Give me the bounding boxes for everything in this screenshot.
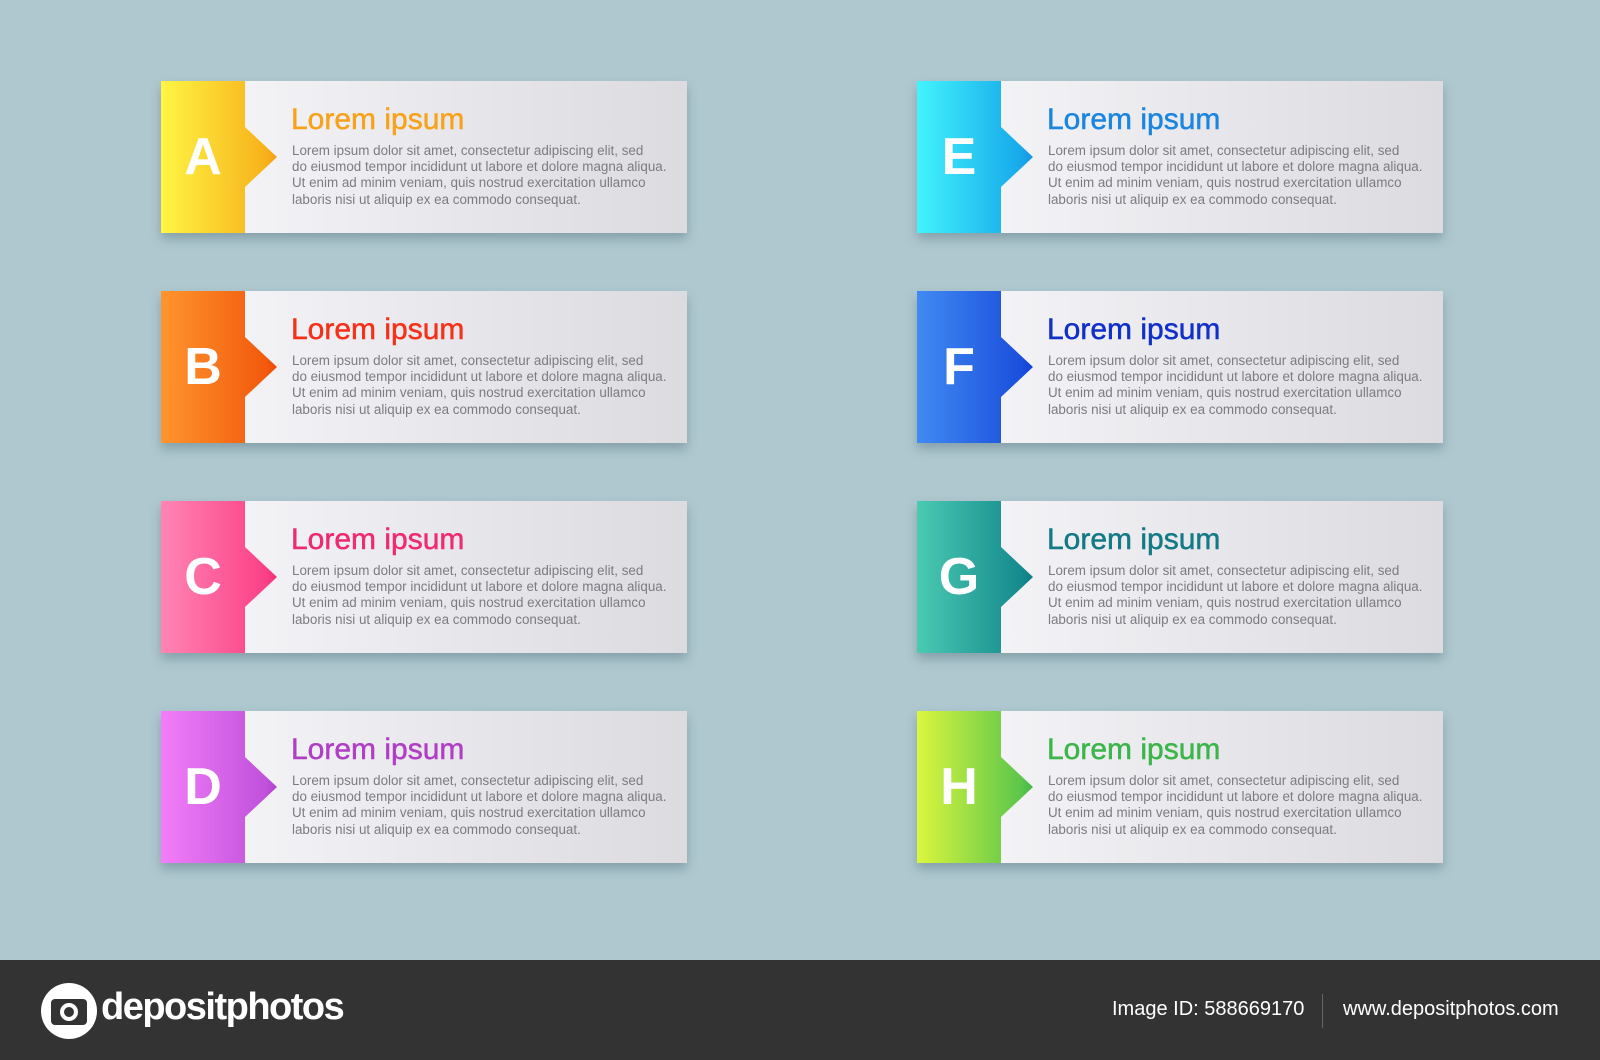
body F: laboris nisi ut aliquip ex ea commodo consequat. [1048, 402, 1337, 417]
body F: do eiusmod tempor incididunt ut labore et dolore magna aliqua. [1048, 369, 1422, 384]
letter C: C [184, 548, 222, 606]
tab A [161, 81, 277, 233]
body E [1048, 143, 1422, 207]
body E: Lorem ipsum dolor sit amet, consectetur adipiscing elit, sed [1048, 143, 1399, 158]
tab C [161, 501, 277, 653]
title C: Lorem ipsum [291, 523, 464, 556]
tab E [917, 81, 1033, 233]
body C: Lorem ipsum dolor sit amet, consectetur adipiscing elit, sed [292, 563, 643, 578]
body D: Lorem ipsum dolor sit amet, consectetur adipiscing elit, sed [292, 773, 643, 788]
body D: Ut enim ad minim veniam, quis nostrud exercitation ullamco [292, 805, 646, 820]
tab H [917, 711, 1033, 863]
card F [917, 291, 1443, 443]
letter F: F [943, 338, 975, 396]
body G [1048, 563, 1422, 627]
body A [292, 143, 666, 207]
body D [292, 773, 666, 837]
title B: Lorem ipsum [291, 313, 464, 346]
tab D [161, 711, 277, 863]
card G [917, 501, 1443, 653]
tab F [917, 291, 1033, 443]
body F: Ut enim ad minim veniam, quis nostrud exercitation ullamco [1048, 385, 1402, 400]
body B: Lorem ipsum dolor sit amet, consectetur adipiscing elit, sed [292, 353, 643, 368]
body F: Lorem ipsum dolor sit amet, consectetur adipiscing elit, sed [1048, 353, 1399, 368]
letter G: G [939, 548, 979, 606]
body G: Ut enim ad minim veniam, quis nostrud exercitation ullamco [1048, 595, 1402, 610]
body C [292, 563, 666, 627]
body H: Ut enim ad minim veniam, quis nostrud exercitation ullamco [1048, 805, 1402, 820]
body D: laboris nisi ut aliquip ex ea commodo consequat. [292, 822, 581, 837]
body B: do eiusmod tempor incididunt ut labore et dolore magna aliqua. [292, 369, 666, 384]
body D: do eiusmod tempor incididunt ut labore et dolore magna aliqua. [292, 789, 666, 804]
letter E: E [942, 128, 976, 186]
body E: do eiusmod tempor incididunt ut labore et dolore magna aliqua. [1048, 159, 1422, 174]
letter A: A [184, 128, 222, 186]
body H: Lorem ipsum dolor sit amet, consectetur adipiscing elit, sed [1048, 773, 1399, 788]
title G: Lorem ipsum [1047, 523, 1220, 556]
tab B [161, 291, 277, 443]
image id: Image ID: 588669170 [1112, 998, 1304, 1020]
body A: Ut enim ad minim veniam, quis nostrud exercitation ullamco [292, 175, 646, 190]
body C: do eiusmod tempor incididunt ut labore et dolore magna aliqua. [292, 579, 666, 594]
letter H: H [940, 758, 978, 816]
logo text: depositphotos [101, 986, 343, 1028]
card C [161, 501, 687, 653]
body C: laboris nisi ut aliquip ex ea commodo consequat. [292, 612, 581, 627]
tab G [917, 501, 1033, 653]
body H: do eiusmod tempor incididunt ut labore et dolore magna aliqua. [1048, 789, 1422, 804]
title E: Lorem ipsum [1047, 103, 1220, 136]
website: www.depositphotos.com [1343, 998, 1559, 1020]
body G: Lorem ipsum dolor sit amet, consectetur adipiscing elit, sed [1048, 563, 1399, 578]
body A: Lorem ipsum dolor sit amet, consectetur adipiscing elit, sed [292, 143, 643, 158]
card D [161, 711, 687, 863]
body B: laboris nisi ut aliquip ex ea commodo consequat. [292, 402, 581, 417]
body G: laboris nisi ut aliquip ex ea commodo consequat. [1048, 612, 1337, 627]
card B [161, 291, 687, 443]
card A [161, 81, 687, 233]
body E: laboris nisi ut aliquip ex ea commodo consequat. [1048, 192, 1337, 207]
body F [1048, 353, 1422, 417]
card E [917, 81, 1443, 233]
footer [0, 960, 1600, 1060]
body B [292, 353, 666, 417]
body G: do eiusmod tempor incididunt ut labore et dolore magna aliqua. [1048, 579, 1422, 594]
body A: laboris nisi ut aliquip ex ea commodo consequat. [292, 192, 581, 207]
body B: Ut enim ad minim veniam, quis nostrud exercitation ullamco [292, 385, 646, 400]
body H [1048, 773, 1422, 837]
body A: do eiusmod tempor incididunt ut labore et dolore magna aliqua. [292, 159, 666, 174]
letter D: D [184, 758, 222, 816]
title H: Lorem ipsum [1047, 733, 1220, 766]
title A: Lorem ipsum [291, 103, 464, 136]
body C: Ut enim ad minim veniam, quis nostrud exercitation ullamco [292, 595, 646, 610]
letter B: B [184, 338, 222, 396]
logo icon [41, 983, 97, 1039]
body E: Ut enim ad minim veniam, quis nostrud exercitation ullamco [1048, 175, 1402, 190]
card H [917, 711, 1443, 863]
title D: Lorem ipsum [291, 733, 464, 766]
body H: laboris nisi ut aliquip ex ea commodo consequat. [1048, 822, 1337, 837]
title F: Lorem ipsum [1047, 313, 1220, 346]
